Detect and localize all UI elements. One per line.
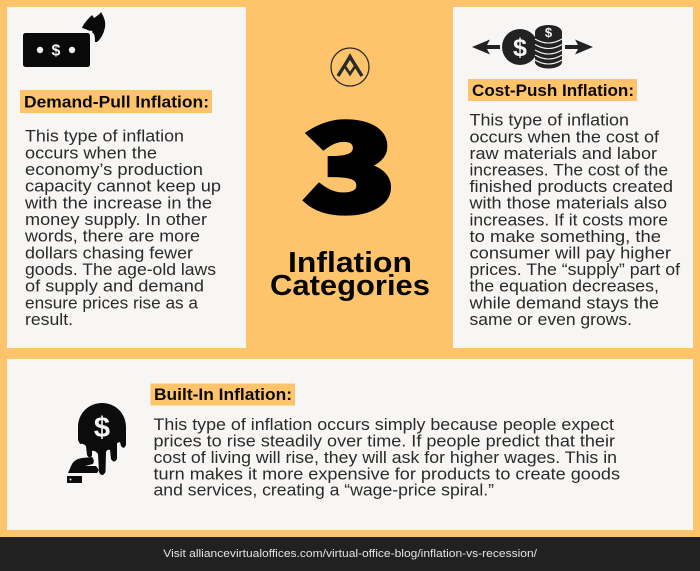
icon: right arrow: [565, 40, 593, 54]
panel: demand-pull inflation: [7, 7, 246, 348]
text block: cost-push description: increases. The cost of the: [470, 162, 668, 180]
title: inflation categories: Categories: [270, 270, 430, 302]
icon: coin stack: $: [545, 25, 553, 40]
panel: cost-push inflation: [453, 7, 693, 348]
text block: cost-push description: same or even grows.: [470, 311, 632, 329]
icon: melting coin over hand: [67, 403, 126, 483]
footer bar: Visit alliancevirtualoffices.com/virtual-office-blog/inflation-vs-recession/: [163, 548, 538, 560]
icon: coin: $: [513, 34, 527, 62]
text block: built-in description: and services, creating a “wage-price spiral.”: [154, 482, 494, 500]
text block: demand-pull description: result.: [25, 311, 73, 329]
text block: demand-pull description: with the increase in the: [24, 194, 212, 212]
text block: cost-push description: increases. If it costs more: [470, 211, 668, 229]
icon: left arrow: [472, 40, 500, 54]
icon: burning dollar bill: [23, 12, 105, 67]
title: inflation categories: [270, 247, 430, 302]
text block: demand-pull description: capacity cannot keep up: [25, 178, 221, 196]
big number 3: 3: [303, 73, 396, 246]
text block: demand-pull description: ensure prices rise as a: [25, 294, 198, 312]
icon: burning dollar bill: $: [52, 42, 61, 60]
text block: cost-push description: consumer will pay higher: [470, 244, 672, 262]
icon: coins with arrows: [472, 25, 593, 68]
heading: cost-push inflation: Cost-Push Inflation:: [472, 81, 634, 100]
icon: hand: [67, 457, 99, 483]
text block: cost-push description: [468, 112, 681, 329]
text block: demand-pull description: economy’s production: [25, 161, 203, 179]
text block: demand-pull description: occurs when the: [25, 144, 157, 162]
text block: demand-pull description: [24, 128, 221, 329]
text block: demand-pull description: This type of inflation: [25, 128, 184, 146]
footer bar: [0, 537, 700, 571]
text block: built-in description: cost of living will rise, they will ask for higher wages. This in: [154, 449, 617, 467]
heading: demand-pull inflation: Demand-Pull Inflation:: [24, 92, 209, 112]
panel: built-in inflation: [7, 359, 693, 530]
icon: melting coin: [78, 403, 126, 475]
panel: center title: [247, 7, 453, 348]
text block: built-in description: turn makes it more expensive for products to create goods: [154, 465, 620, 483]
text block: built-in description: prices to rise steadily over time. If people predict that their: [154, 432, 616, 450]
text block: cost-push description: with those materials also: [468, 195, 667, 213]
text block: demand-pull description: words, there are more: [24, 228, 200, 246]
text block: demand-pull description: money supply. In other: [25, 211, 208, 229]
text block: cost-push description: raw materials and labor: [470, 145, 658, 163]
heading: built-in inflation: Built-In Inflation:: [154, 385, 292, 404]
icon: logo: [331, 48, 369, 86]
text block: cost-push description: prices. The “supply” part of: [470, 261, 681, 279]
text block: built-in description: This type of inflation occurs simply because people expect: [154, 416, 615, 434]
text block: cost-push description: This type of inflation: [470, 112, 629, 130]
text block: cost-push description: to make something, the: [470, 228, 661, 246]
text block: cost-push description: while demand stays the: [468, 294, 659, 312]
text block: built-in description: [154, 416, 620, 500]
text block: cost-push description: occurs when the cost of: [470, 128, 660, 146]
text block: cost-push description: finished products created: [470, 178, 673, 196]
title: inflation categories: Inflation: [288, 247, 412, 279]
text block: demand-pull description: dollars chasing fewer: [25, 244, 194, 262]
icon: melting coin over hand: $: [94, 412, 110, 444]
text block: cost-push description: the equation decreases,: [470, 278, 659, 296]
text block: demand-pull description: of supply and demand: [25, 278, 204, 296]
text block: demand-pull description: goods. The age-old laws: [25, 261, 216, 279]
